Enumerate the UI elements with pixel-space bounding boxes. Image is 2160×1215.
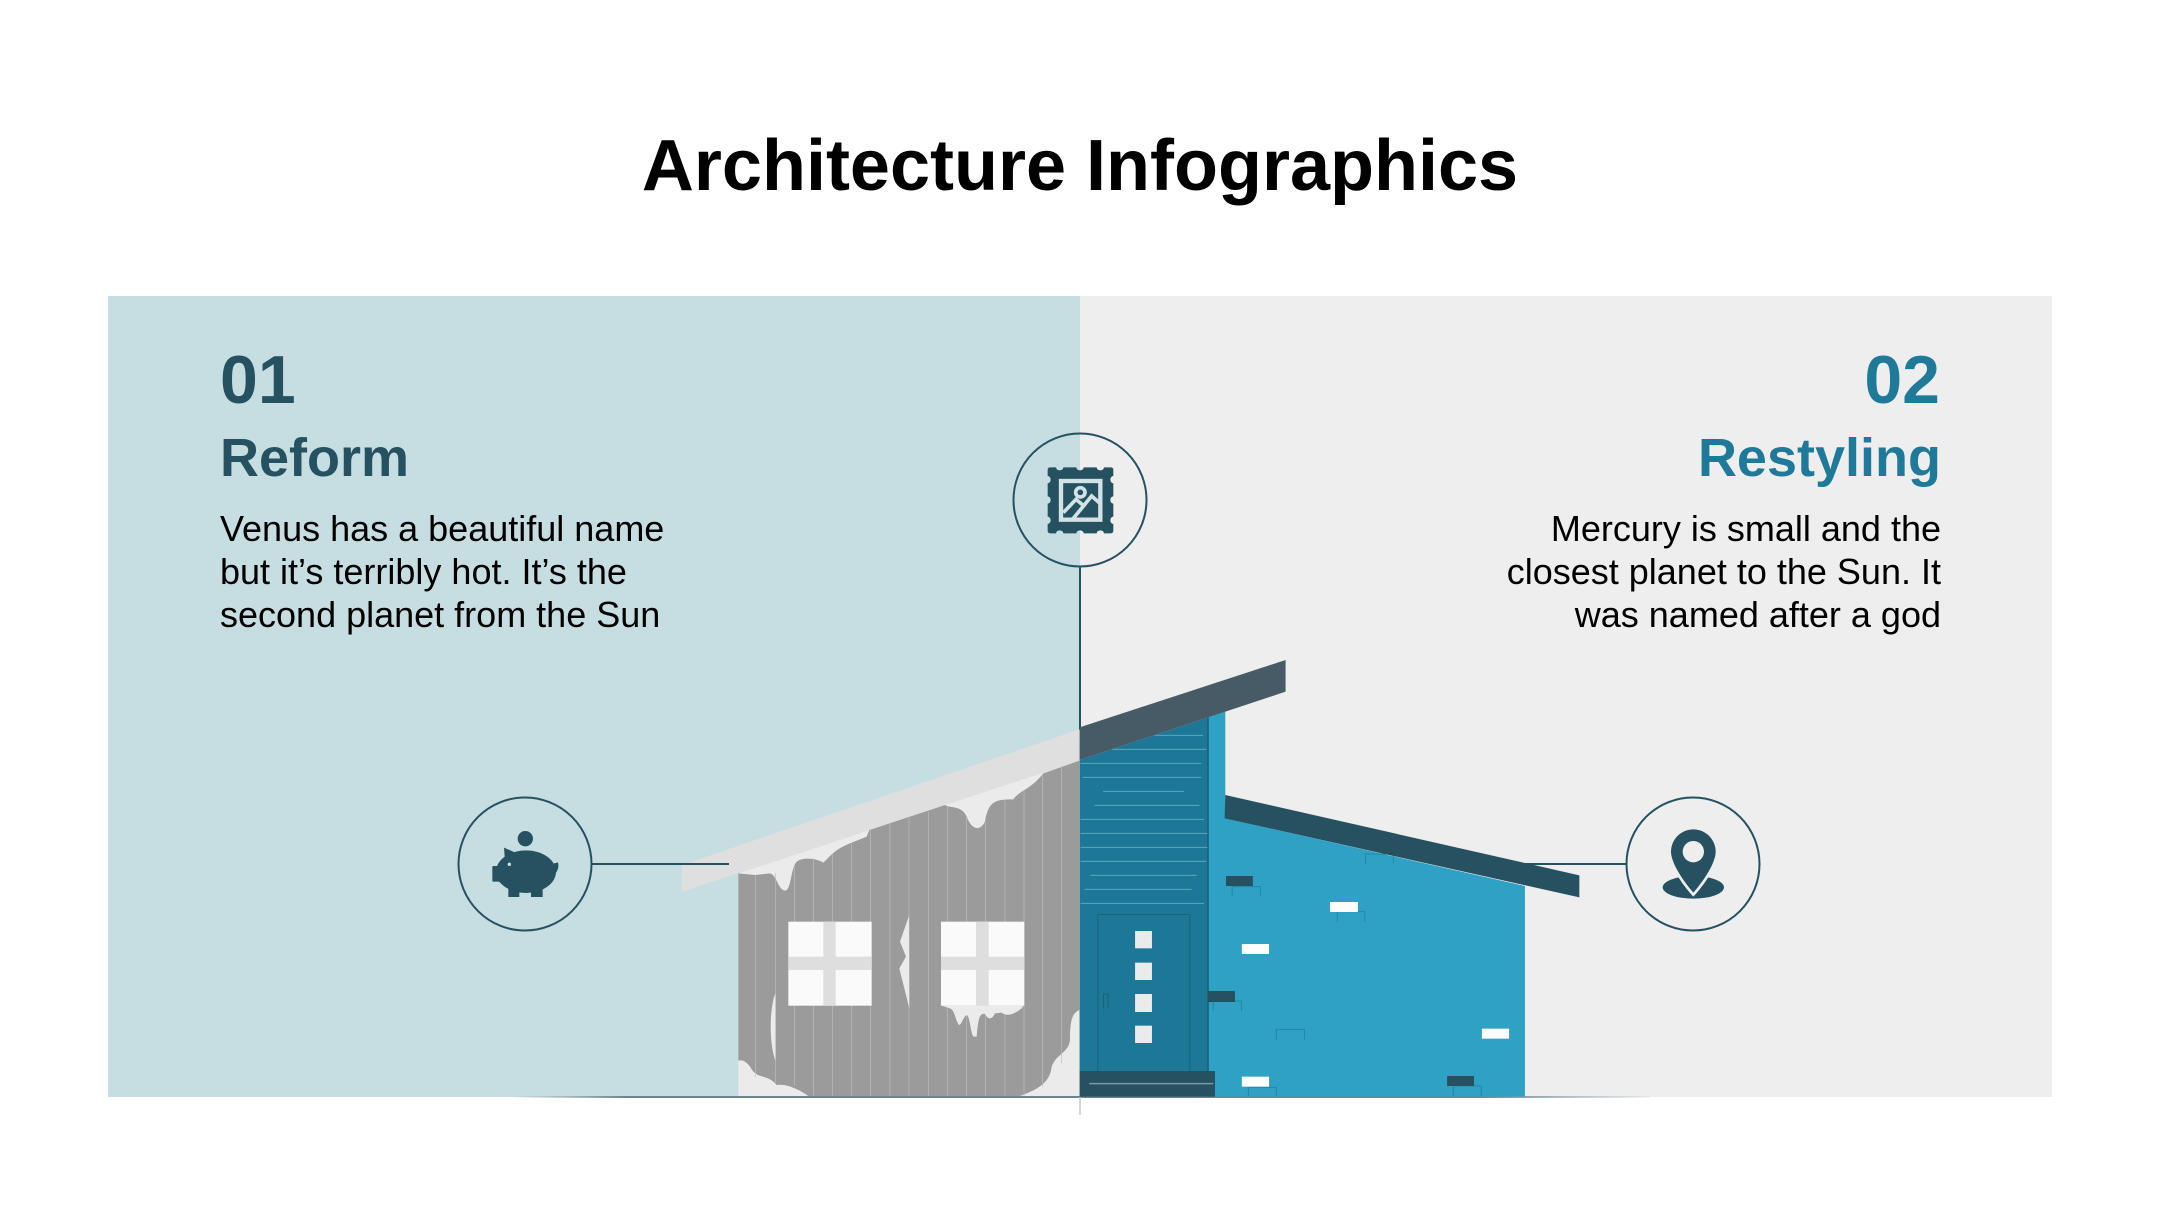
text block: 01 reform — [220, 342, 664, 635]
illustration: restyled half of house — [1080, 660, 1579, 1097]
white bricks — [1242, 902, 1509, 1087]
crack in wall — [899, 916, 909, 1008]
number 02: 02 — [1864, 342, 1940, 418]
connector: top icon to roof — [1079, 566, 1081, 730]
door — [1098, 914, 1190, 1072]
heading: reform: Reform — [220, 428, 409, 488]
front section edge — [1207, 717, 1209, 1072]
body: reform description: but it’s terribly hot. It’s the — [220, 551, 627, 592]
blue brick wall — [1208, 712, 1525, 1097]
siding lines — [1081, 735, 1207, 903]
siding plank lines — [756, 767, 1062, 1096]
panel: restyling background — [1080, 296, 2052, 1097]
body: restyling description: was named after a god — [1574, 594, 1941, 635]
brick outlines — [1213, 854, 1481, 1096]
worn roof — [682, 729, 1079, 892]
stem below ground — [1079, 1097, 1081, 1115]
connector: left icon to roof — [591, 863, 729, 865]
body: reform description: Venus has a beautiful name — [220, 508, 664, 549]
connector: right icon to roof — [1520, 863, 1627, 865]
body: restyling description: Mercury is small and the — [1551, 508, 1941, 549]
front section — [1080, 717, 1208, 1072]
heading: restyling: Restyling — [1698, 428, 1941, 488]
entrance step — [1080, 1071, 1215, 1097]
peeled patch — [771, 993, 775, 1061]
icon: picture stamp — [1014, 434, 1146, 566]
lower roof — [1225, 795, 1579, 897]
panel: reform background — [108, 296, 1080, 1097]
peeling grey siding — [738, 761, 1079, 1096]
number 01: 01 — [220, 342, 296, 418]
text block: 02 restyling — [1507, 342, 1941, 635]
paint drips under window — [942, 1006, 1023, 1037]
icon: map pin — [1626, 798, 1760, 930]
window: left — [788, 922, 872, 1006]
icon: piggy bank — [458, 798, 592, 930]
body: restyling description: closest planet to the Sun. It — [1507, 551, 1941, 592]
dark bricks — [1208, 876, 1474, 1086]
title: Architecture Infographics — [642, 126, 1518, 206]
body: reform description: second planet from the Sun — [220, 594, 660, 635]
window: right — [941, 922, 1024, 1006]
baseline ground — [510, 1096, 1650, 1098]
illustration: worn half of house — [682, 729, 1079, 1096]
exposed wall — [738, 761, 1079, 1096]
upper roof — [1080, 660, 1286, 760]
